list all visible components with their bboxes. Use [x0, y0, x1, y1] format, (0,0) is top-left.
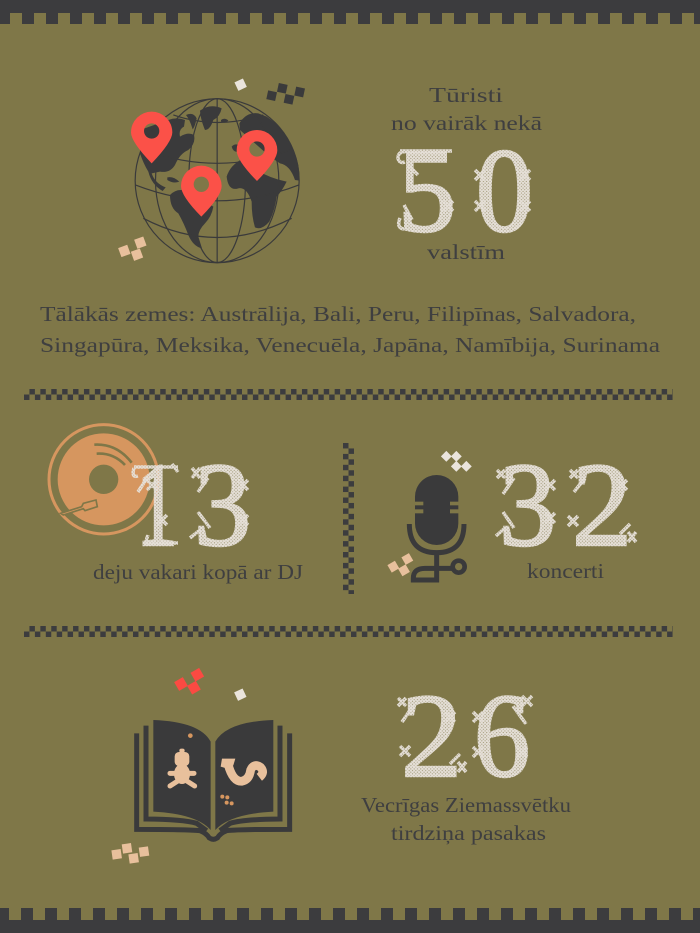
number: 50 [398, 124, 533, 257]
map pins [131, 112, 277, 217]
stitch flourishes [133, 464, 248, 544]
icon: turntable [49, 425, 158, 534]
decorative stitches [118, 78, 305, 261]
number: 32: 3 [499, 438, 556, 571]
text: fairy tales: Vecrīgas Ziemassvētku [361, 793, 572, 817]
rooster [221, 759, 263, 781]
text: tourists intro [391, 83, 543, 135]
book pages [153, 720, 273, 830]
icon: open book [111, 668, 290, 864]
globe grid lines [135, 99, 299, 263]
number: 26 [398, 669, 532, 802]
stitch flourishes [398, 151, 530, 229]
stitch flourishes [398, 696, 532, 772]
text: countries: valstīm [427, 240, 505, 264]
divider 2 [24, 626, 673, 637]
number: 26: 2 [401, 669, 462, 802]
text: fairy tales [361, 793, 572, 845]
number: 32 [496, 438, 636, 571]
number: 13: 1 [136, 438, 178, 571]
text: concerts: koncerti [527, 559, 604, 583]
number: 50: 5 [398, 124, 456, 257]
icon: globe with map pins [118, 78, 305, 263]
stitches [188, 733, 234, 805]
bottom zigzag border [0, 908, 700, 933]
text: farthest countries: Tālākās zemes: Austrālija, Bali, Peru, Filipīnas, Salvadora, [40, 302, 636, 326]
vertical divider [343, 443, 354, 594]
stitch flourishes [496, 470, 636, 542]
text: tourists intro: Tūristi [429, 83, 503, 107]
text: dance evenings: deju vakari kopā ar DJ [93, 560, 303, 584]
globe continents [140, 106, 299, 248]
top zigzag border [0, 0, 700, 24]
divider 1 [24, 389, 673, 400]
text: fairy tales: tirdziņa pasakas [391, 821, 546, 845]
icon: microphone [387, 451, 472, 580]
number: 50: 0 [476, 124, 533, 257]
text: tourists intro: no vairāk nekā [391, 111, 543, 135]
number: 13 [133, 438, 251, 571]
text: farthest countries: Singapūra, Meksika, Venecuēla, Japāna, Namībija, Surinama [40, 333, 661, 357]
number: 32: 2 [572, 438, 632, 571]
gingerbread man [170, 749, 195, 786]
text: farthest countries [40, 302, 661, 357]
number: 26: 6 [474, 669, 530, 802]
number: 13: 3 [194, 438, 251, 571]
